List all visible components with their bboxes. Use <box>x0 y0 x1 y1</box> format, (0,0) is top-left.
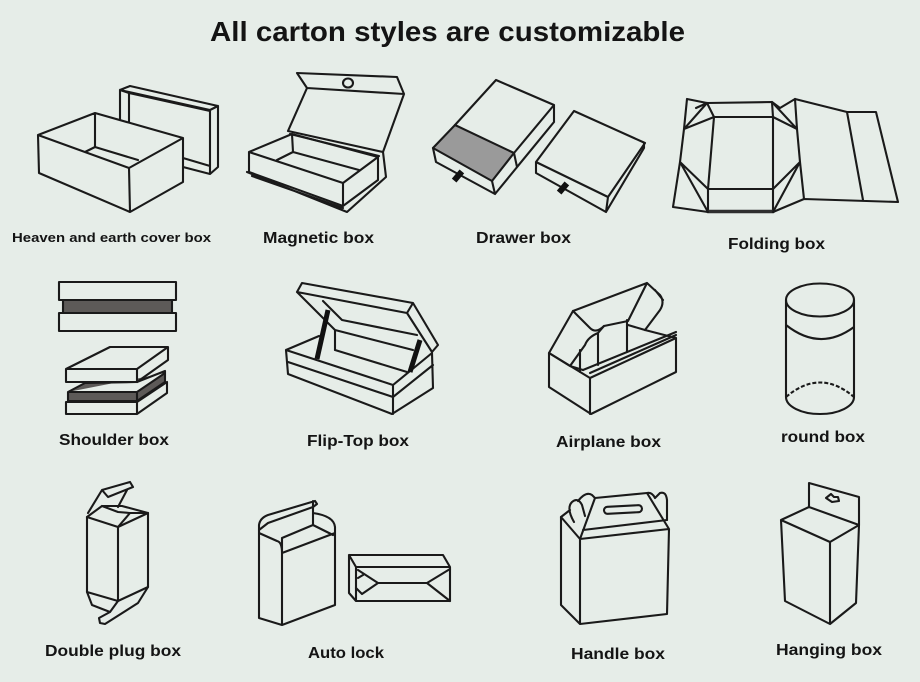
label: round box <box>781 429 865 446</box>
panel: shoulder box <box>59 282 176 449</box>
label: Flip-Top box <box>307 433 409 450</box>
label: Magnetic box <box>263 230 374 247</box>
icon: drawer pull tabs <box>452 169 569 195</box>
title: All carton styles are customizable <box>210 16 685 47</box>
icon: auto lock flat box <box>349 555 450 601</box>
label: Folding box <box>728 236 825 253</box>
icon: handle box <box>561 493 669 624</box>
label: Auto lock <box>308 645 384 662</box>
panel: round box <box>781 284 865 446</box>
icon: flip-top box <box>286 283 438 414</box>
panel: handle box <box>561 493 669 663</box>
panel: heaven and earth cover box <box>12 86 218 245</box>
icon: double plug box <box>87 482 148 624</box>
label: Drawer box <box>476 230 571 247</box>
icon: drawer box <box>433 80 645 212</box>
panel: hanging box <box>776 483 882 659</box>
panel: folding box <box>673 99 898 253</box>
icon: hanging box <box>781 483 859 624</box>
panel: magnetic box <box>247 73 404 247</box>
icon: round box <box>786 284 854 414</box>
icon: shoulder box <box>59 282 176 414</box>
icon: auto lock tall box <box>259 501 335 625</box>
panel: drawer box <box>433 80 645 247</box>
icon: airplane box <box>549 283 676 414</box>
label: Double plug box <box>45 643 181 660</box>
label: Hanging box <box>776 642 882 659</box>
label: Heaven and earth cover box <box>12 230 212 245</box>
panel: auto lock <box>259 501 450 662</box>
label: Shoulder box <box>59 432 169 449</box>
icon: magnetic box <box>247 73 404 212</box>
panel: flip-top box <box>286 283 438 450</box>
icon: heaven and earth cover box <box>38 86 218 212</box>
panel: airplane box <box>549 283 676 451</box>
icon: folding box <box>673 99 898 212</box>
panel: double plug box <box>45 482 181 660</box>
icon: flip-top support straps <box>317 310 420 372</box>
label: Handle box <box>571 646 665 663</box>
label: Airplane box <box>556 434 661 451</box>
